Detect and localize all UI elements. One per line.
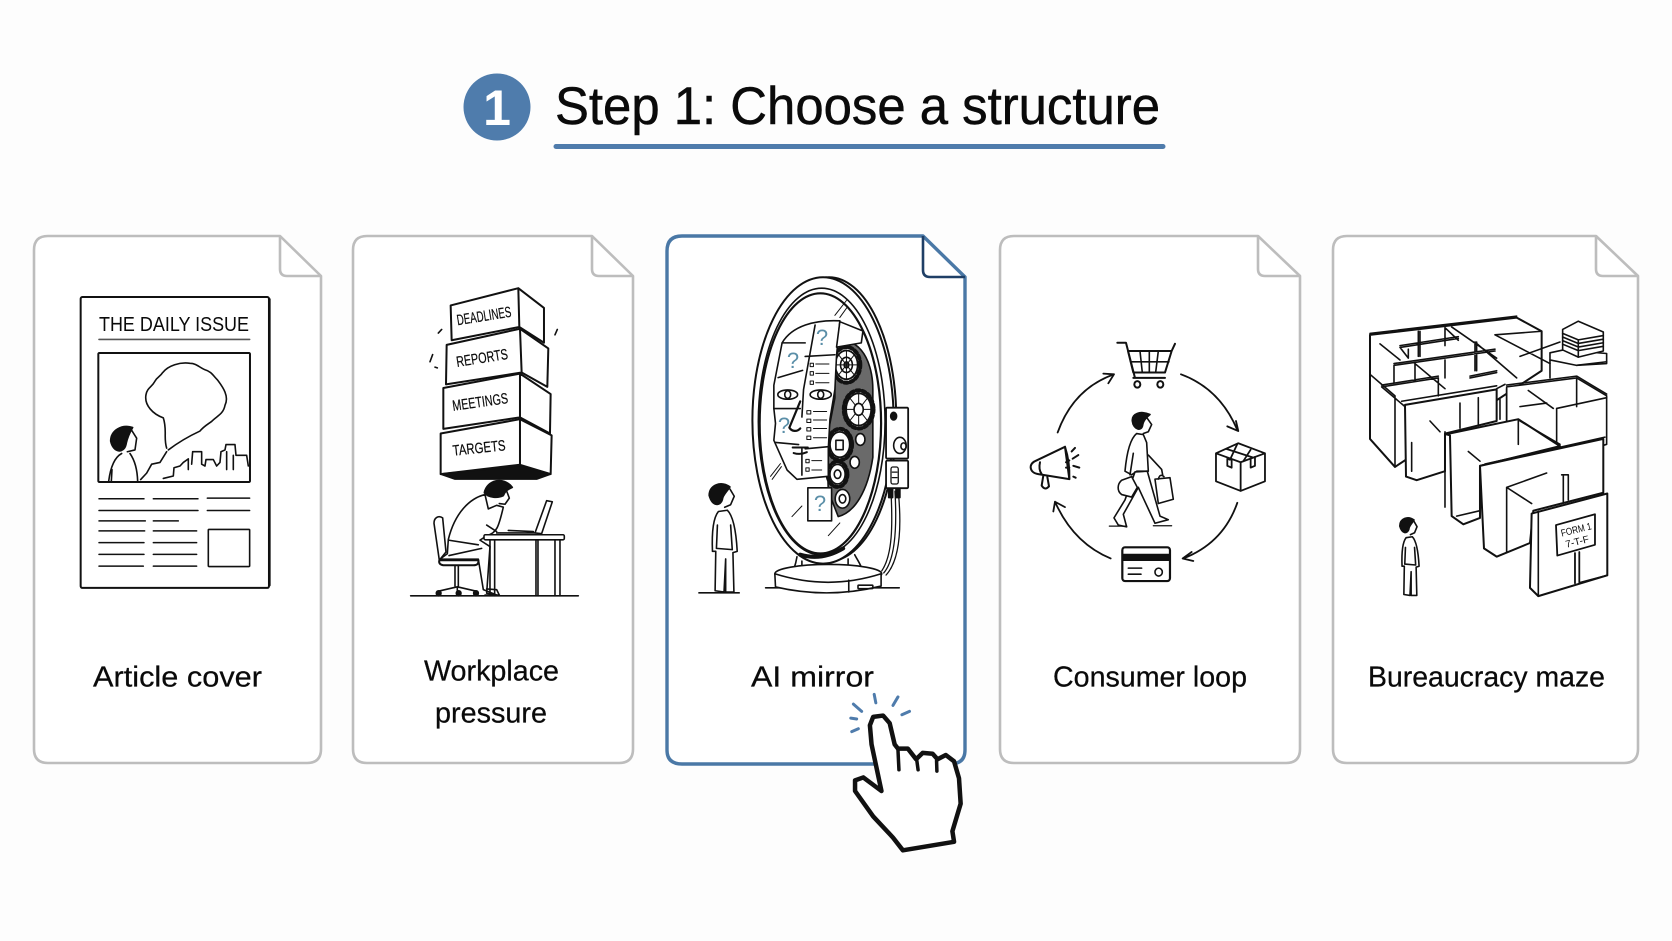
panel: workplace pressure	[353, 236, 633, 763]
illustration: maze of walls: FORM 1	[1560, 521, 1593, 540]
illustration: newspaper: THE DAILY ISSUE	[99, 314, 249, 336]
icon: megaphone	[1031, 447, 1079, 488]
icon: small person	[1400, 518, 1419, 595]
arrow: megaphone to cart	[1058, 374, 1114, 432]
illustration: consumer cycle	[1031, 343, 1265, 581]
arrow: box to card	[1183, 503, 1237, 561]
panel: consumer loop	[1000, 236, 1300, 763]
illustration: stacked boxes on worker	[411, 288, 578, 596]
label: Bureaucracy maze	[1368, 662, 1605, 694]
question marks on mirror panels: ?	[814, 491, 826, 516]
card outline	[1000, 236, 1300, 763]
icon: walking shopper	[1109, 413, 1173, 527]
illustration: stacked boxes on worker: DEADLINES	[456, 304, 513, 329]
card outline	[34, 236, 321, 763]
icon: credit card	[1122, 547, 1170, 581]
question marks on mirror panels: ?	[778, 413, 790, 438]
title underline	[554, 144, 1166, 149]
label: Workplace	[424, 656, 559, 688]
arrow: cart to box	[1181, 374, 1238, 431]
illustration: stacked boxes on worker: MEETINGS	[451, 390, 509, 415]
card outline	[353, 236, 633, 763]
panel: bureaucracy maze	[1333, 236, 1638, 763]
panel: article cover	[34, 236, 321, 763]
label: Consumer loop	[1053, 662, 1247, 694]
illustration: maze of walls	[1370, 316, 1607, 596]
page fold	[592, 236, 633, 276]
label: Article cover	[93, 662, 262, 694]
page fold	[1596, 236, 1638, 276]
page fold	[1258, 236, 1300, 276]
question marks on mirror panels: ?	[787, 348, 799, 373]
illustration: stacked boxes on worker: REPORTS	[455, 346, 509, 371]
card outline	[667, 236, 965, 764]
illustration: stacked boxes on worker: TARGETS	[452, 437, 506, 460]
icon: parcel box	[1216, 443, 1265, 491]
icon: pointing hand cursor with click sparks	[851, 694, 961, 850]
page fold	[280, 236, 321, 276]
title: Step 1: Choose a structure	[555, 77, 1160, 136]
illustration: person and AI mirror	[699, 277, 908, 593]
illustration: maze of walls: 7-T-F	[1564, 534, 1590, 551]
question marks on mirror panels: ?	[816, 325, 828, 350]
card outline	[1333, 236, 1638, 763]
arrow: card to megaphone	[1053, 502, 1111, 558]
question marks on mirror panels	[778, 325, 828, 516]
page fold	[923, 236, 965, 277]
numbered step badge	[464, 74, 530, 140]
label: AI mirror	[751, 662, 874, 694]
numbered step badge: 1	[483, 80, 511, 136]
label: pressure	[435, 698, 547, 730]
panel: AI mirror (selected)	[667, 236, 965, 764]
icon: shopping cart	[1117, 343, 1175, 388]
illustration: newspaper	[81, 297, 270, 588]
label	[424, 656, 559, 730]
